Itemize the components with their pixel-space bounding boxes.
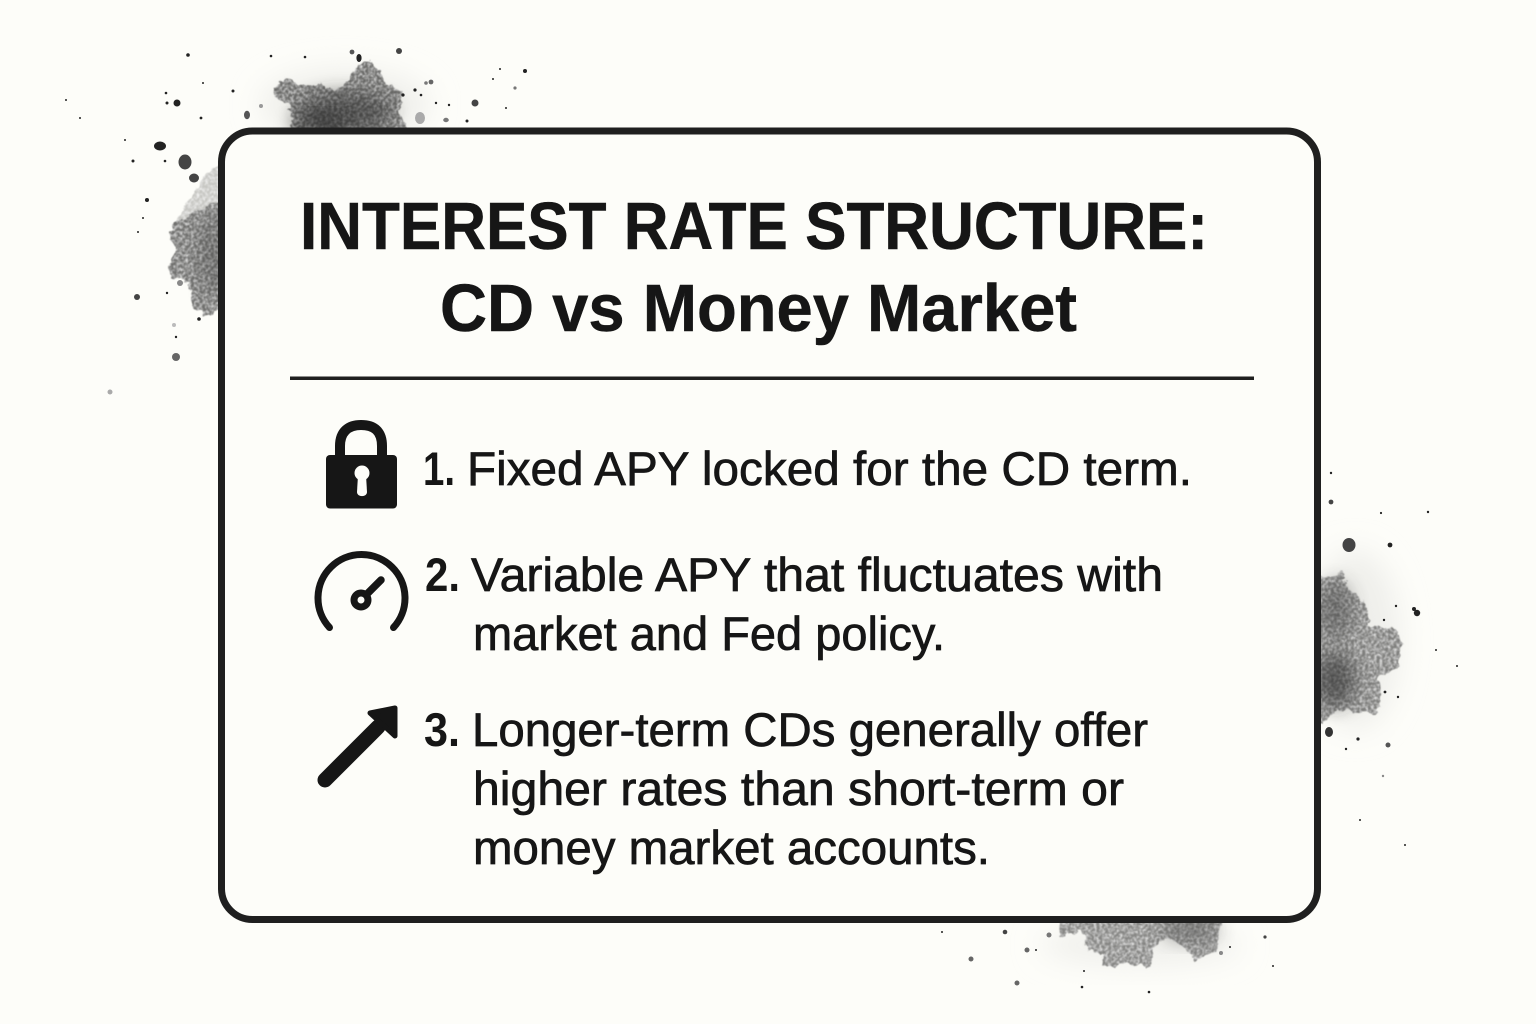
icon: gauge xyxy=(318,555,405,628)
icon: rising arrow xyxy=(325,708,395,780)
ink splatter: right xyxy=(1310,550,1404,730)
list item 3 xyxy=(424,703,1148,874)
list item 3: Longer-term CDs generally offer xyxy=(472,703,1148,756)
ink splatter: top left xyxy=(260,60,430,141)
list item 2: market and Fed policy. xyxy=(473,607,945,660)
title: CD vs Money Market xyxy=(440,271,1077,346)
ink splatter: bottom xyxy=(1040,918,1240,968)
title: INTEREST RATE STRUCTURE: xyxy=(300,189,1208,264)
ink splatter: left xyxy=(167,160,224,317)
list item 2: Variable APY that fluctuates with xyxy=(471,548,1163,601)
title xyxy=(300,189,1208,346)
list item 1: Fixed APY locked for the CD term. xyxy=(467,442,1192,495)
list item 3: money market accounts. xyxy=(473,821,990,874)
list item 3: higher rates than short-term or xyxy=(473,762,1124,815)
list item 3: 3. xyxy=(424,703,460,756)
list item 1: 1. xyxy=(423,442,455,495)
list item 2: 2. xyxy=(425,548,460,601)
list item 2 xyxy=(425,548,1163,660)
panel: main card xyxy=(222,131,1318,920)
icon: padlock xyxy=(326,425,397,508)
